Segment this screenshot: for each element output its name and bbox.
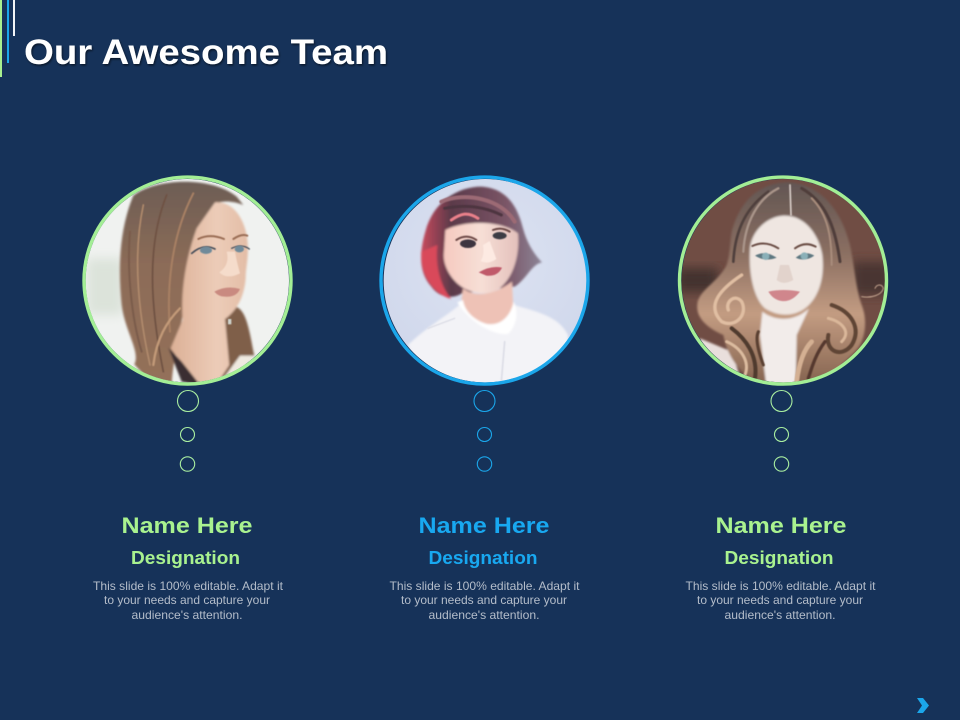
description [686, 579, 876, 622]
designation: Designation [131, 547, 240, 568]
description: to your needs and capture your [401, 593, 567, 607]
portrait: woman in profile with long brown hair [86, 179, 289, 382]
description: This slide is 100% editable. Adapt it [390, 579, 580, 593]
panel: team member 2 [378, 175, 595, 622]
panel: team member 3 [675, 175, 892, 622]
portrait ring [381, 177, 588, 384]
accent lines [0, 0, 15, 77]
designation: Designation [428, 547, 538, 568]
portrait ring [680, 177, 886, 384]
title: Our Awesome Team [24, 33, 388, 72]
icon: next chevron [917, 698, 929, 713]
thought bubbles [178, 390, 198, 471]
description: audience's attention. [132, 608, 242, 622]
thought bubbles [474, 390, 495, 471]
portrait ring [84, 177, 291, 384]
name: Name Here [716, 513, 846, 538]
description: audience's attention. [428, 608, 540, 622]
description: to your needs and capture your [104, 593, 270, 607]
thought bubbles [771, 390, 792, 471]
description: to your needs and capture your [697, 593, 863, 607]
portrait: woman with short red-tinted bob and white blouse [384, 179, 586, 382]
panel: team member 1 [80, 175, 297, 622]
name: Name Here [122, 513, 252, 538]
description: This slide is 100% editable. Adapt it [686, 579, 876, 593]
description [390, 579, 580, 622]
description [93, 579, 284, 622]
description: This slide is 100% editable. Adapt it [93, 579, 284, 593]
designation: Designation [724, 547, 834, 568]
description: audience's attention. [724, 608, 836, 622]
name: Name Here [418, 513, 550, 538]
portrait: woman with long curly hair on brown background [682, 179, 885, 382]
